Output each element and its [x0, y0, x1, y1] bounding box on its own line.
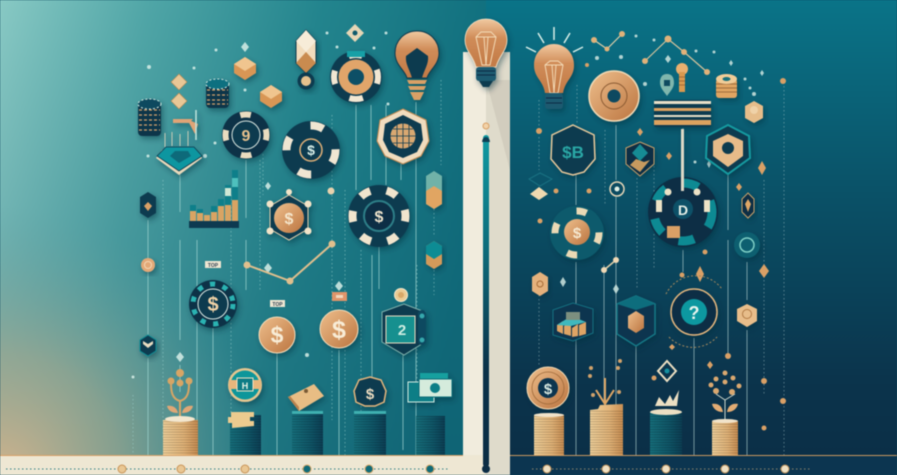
icon: gold hex tag left [532, 272, 548, 296]
icon: gold hex right [745, 101, 763, 123]
icon: shield gold [706, 125, 750, 174]
line chart: left middle [244, 240, 336, 284]
icon: gold coin stack right [716, 74, 737, 98]
badge: dollar hex: $ [366, 386, 375, 403]
coin pile: left 4 [354, 411, 386, 455]
poker chip: large dollar: $ [375, 209, 384, 226]
icon: light bulb left [395, 31, 439, 100]
icon: small gold hex tag [742, 193, 754, 218]
label tag 2 [270, 300, 285, 308]
badge: teal hotel [228, 368, 262, 402]
gold accent sparkles, right [536, 63, 786, 430]
poker chip: dollar: $ [307, 142, 315, 158]
dashed arcs around question coin [666, 276, 722, 347]
icon: cube boxes [553, 303, 593, 341]
coin: question mark [671, 289, 717, 335]
icon: tall pin [676, 63, 688, 92]
icon: crystal [296, 30, 316, 73]
icon: small left coin [141, 258, 155, 272]
coin: dollar left [259, 317, 295, 353]
poker chip: cross hub: D [678, 202, 688, 218]
line chart: right small [591, 31, 625, 52]
icon: hexagon coin with nodes [266, 189, 312, 240]
icon: hex screen number 2 [382, 304, 426, 355]
icon: small node coin [328, 188, 334, 194]
coin pile: right 2 [590, 404, 623, 455]
icon: sprout [167, 370, 193, 417]
coin pile: left 5 [416, 416, 445, 455]
icon: tray with arrow [156, 110, 202, 175]
connector lines, right panel [539, 82, 784, 455]
icon: map pin [660, 74, 674, 96]
icon: hex screen number 2: 2 [398, 322, 406, 339]
coin: large dollar right [527, 367, 569, 409]
left panel background [0, 0, 486, 475]
icon: teal round badge [734, 232, 760, 258]
poker chip: 9: 9 [242, 128, 251, 145]
icon: globe hex badge [377, 109, 429, 164]
icon: bulb rays [526, 27, 583, 52]
badge: teal hotel: H [242, 381, 248, 391]
icon: top-left chip stack [138, 99, 161, 136]
center divider strip [463, 52, 510, 475]
icon: banknotes [408, 373, 452, 402]
poker chip: 9 [222, 111, 270, 159]
coin pile: right 3 [650, 409, 682, 455]
icon: hexagon coin with nodes: $ [285, 211, 294, 228]
icon: small gold diamonds [171, 74, 187, 109]
icon: gold stacked hex [426, 171, 442, 209]
poker chip: large dollar [348, 185, 410, 247]
icon: arrow with seeds [588, 359, 622, 404]
small linked nodes [601, 257, 619, 273]
coin: target medallion [589, 71, 639, 121]
poker chip: cross hub [648, 129, 718, 247]
icon: small diamond cap [529, 173, 552, 200]
icon: hex tower [617, 296, 655, 346]
label tag 2: TOP [272, 302, 283, 308]
icon: envelope bill [288, 384, 324, 411]
label tag 1: TOP [208, 263, 219, 269]
bar chart [189, 170, 239, 228]
icon: top diamond [346, 24, 364, 42]
icon: center light bulb [465, 19, 507, 87]
icon: light bulb right [534, 44, 574, 109]
left panel scattered sparkles [132, 32, 390, 378]
coin: dollar right [320, 310, 358, 348]
coin pile: left 1 [163, 416, 198, 455]
icon: poker chip top [330, 51, 382, 103]
poker chip: teal dollar [550, 206, 604, 260]
icon: striped server box [654, 100, 711, 127]
icon: left hex marker [140, 192, 156, 218]
icon: teal stacked hex [426, 241, 442, 269]
icon: second chip stack [206, 79, 229, 108]
coin pile: left 2 [228, 412, 261, 455]
icon: left chevron hex [140, 335, 156, 356]
poker chip: B: $ [207, 294, 219, 316]
center track [482, 123, 490, 473]
poker chip: dollar [282, 121, 340, 179]
right panel scattered sparkles [560, 34, 764, 294]
icon: gold hex right lower [737, 304, 757, 327]
icon: node coin [394, 288, 408, 302]
coin: dollar right: $ [332, 316, 346, 344]
coin: question mark: ? [688, 303, 700, 323]
icon: diamond and zigzag [652, 361, 679, 406]
right panel background [486, 0, 897, 475]
coin pile: left 3 [292, 411, 323, 455]
coin pile: right 4 [712, 419, 738, 455]
icon: gold hex boxes [234, 57, 282, 108]
icon: hex diamond shield [626, 142, 654, 176]
line chart: right large [642, 36, 710, 75]
badge: dollar hex [354, 377, 386, 406]
coin: large dollar right: $ [544, 381, 553, 398]
bottom timeline bar, left [0, 455, 463, 475]
icon: small coin [298, 72, 314, 90]
connector lines, left panel [133, 80, 441, 455]
bottom timeline bar, right [510, 455, 897, 475]
icon: growth tree [708, 370, 742, 420]
icon: ring node [610, 182, 624, 196]
label tag 1 [205, 261, 221, 269]
label tag 3 [332, 292, 347, 301]
poker chip: teal dollar: $ [573, 225, 582, 242]
poker chip: B [189, 280, 237, 328]
icon: shield SB: $B [562, 143, 584, 162]
icon: shield SB [551, 125, 595, 175]
coin pile: right 1 [534, 413, 564, 455]
coin: dollar left: $ [271, 322, 284, 348]
